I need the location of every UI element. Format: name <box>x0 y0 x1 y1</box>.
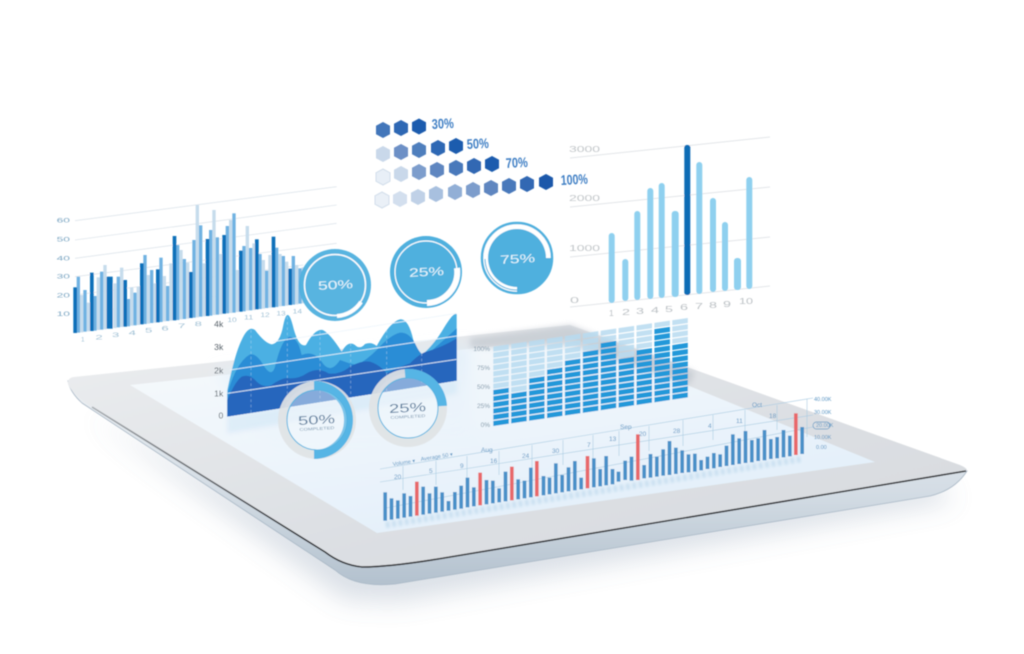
x axis labels: 2 <box>622 307 630 317</box>
bars <box>609 162 752 303</box>
area chart <box>214 313 457 433</box>
dark bars <box>73 235 292 333</box>
y axis labels <box>214 319 224 420</box>
donut label: 25% <box>389 400 426 416</box>
x axis labels: 8 <box>195 321 203 328</box>
ring gauge: 25% <box>390 236 462 308</box>
row: 100% <box>375 171 589 208</box>
column cells <box>493 318 688 426</box>
y axis labels: 0 <box>219 410 224 420</box>
x axis labels: 1 <box>609 308 614 318</box>
date and control labels: Average 50 ▾ <box>420 452 453 463</box>
date and control labels: Oct <box>752 402 762 409</box>
tablet side edge <box>68 381 967 585</box>
x axis labels: 9 <box>723 299 731 309</box>
date and control labels: Volume ▾ <box>392 458 416 468</box>
rounded bar chart: right <box>569 137 770 318</box>
chart grid lines <box>75 187 337 314</box>
x axis labels: 4 <box>651 305 659 315</box>
bars: September and October section <box>617 413 804 482</box>
date and control labels <box>392 402 777 481</box>
donut track <box>282 386 352 454</box>
red volume bars <box>415 456 589 516</box>
hexagon progress rows <box>375 115 589 208</box>
back corner shading <box>470 325 695 385</box>
full scene <box>57 115 967 602</box>
x axis labels: 10 <box>739 296 753 306</box>
medium bars <box>77 213 302 333</box>
tablet black seam line <box>92 407 966 567</box>
date and control labels: Aug <box>481 447 493 454</box>
y axis labels: 3000 <box>569 144 600 154</box>
area series: light <box>227 314 457 417</box>
date and control labels: 13 <box>609 436 617 443</box>
x axis labels: 5 <box>665 304 673 314</box>
area grid lines <box>227 313 457 393</box>
row: 100%: 100% <box>560 171 589 188</box>
y axis labels <box>569 144 600 305</box>
x axis labels: 8 <box>709 300 717 310</box>
date and control labels: 11 <box>736 418 743 425</box>
red volume bars <box>636 413 798 480</box>
y axis labels: 0% <box>481 422 490 429</box>
date and control labels: 9 <box>460 463 464 470</box>
tablet top face <box>68 325 967 567</box>
y axis labels: 75% <box>477 365 490 372</box>
right axis labels: 30.00K <box>814 410 832 416</box>
y axis labels <box>57 218 71 318</box>
date and control labels: 20 <box>639 431 647 438</box>
bar reflections <box>386 459 802 525</box>
volume chart <box>380 397 834 525</box>
y axis labels: 25% <box>477 403 490 410</box>
right axis labels: 20.00K <box>816 423 834 429</box>
x axis labels: 6 <box>680 302 688 312</box>
x axis labels: 6 <box>161 326 170 333</box>
date and control labels: 7 <box>587 442 591 449</box>
area series: medium <box>227 328 457 417</box>
grid lines <box>570 137 770 307</box>
highlighted bar <box>684 145 690 295</box>
x axis labels: 3 <box>112 332 120 339</box>
donut caption: COMPLETED <box>390 413 426 420</box>
right axis labels <box>814 397 834 451</box>
x axis labels: 7 <box>695 301 703 311</box>
volume grid <box>380 398 813 508</box>
date and control labels: 18 <box>769 413 777 420</box>
gauge label: 25% <box>409 264 445 280</box>
blue volume bars <box>383 456 614 521</box>
right axis labels: 40.00K <box>814 397 832 403</box>
row: 70% <box>376 154 529 185</box>
donut progress arc <box>314 386 348 454</box>
x axis labels: 12 <box>260 312 270 319</box>
tablet screen <box>130 338 875 533</box>
donut label: 50% <box>298 412 335 428</box>
y axis labels: 100% <box>473 346 490 353</box>
x axis labels: 3 <box>636 306 644 316</box>
date and control labels: 16 <box>490 458 498 465</box>
blue volume bars <box>617 427 804 482</box>
pale bars <box>80 205 305 332</box>
ring gauge: 75% <box>482 223 552 293</box>
y axis labels: 1000 <box>569 243 600 253</box>
ring gauge: 50% <box>299 249 371 321</box>
row: 30% <box>376 115 455 138</box>
donut progress arc <box>405 373 442 406</box>
x axis labels: 11 <box>244 314 254 321</box>
y axis labels: 1k <box>214 389 224 399</box>
highlighted axis value pill <box>813 422 830 429</box>
stacked block chart <box>473 318 688 429</box>
x axis labels <box>609 296 753 318</box>
holographic glow <box>215 345 560 470</box>
date and control labels: 4 <box>708 423 712 430</box>
x axis labels: 4 <box>129 330 137 337</box>
right axis labels: 10.00K <box>814 435 832 441</box>
y axis labels <box>473 346 490 429</box>
y axis labels: 0 <box>570 295 580 305</box>
x axis labels <box>81 308 303 343</box>
date and control labels: 24 <box>522 453 530 460</box>
x axis labels: 14 <box>293 308 303 315</box>
row: 50% <box>376 135 490 162</box>
y axis labels: 3k <box>214 342 224 352</box>
gauge label: 50% <box>318 277 354 293</box>
donut gauge: 50% completed <box>282 386 352 454</box>
y axis labels: 4k <box>214 319 224 329</box>
date and control labels: 5 <box>429 468 433 475</box>
x axis labels: 13 <box>276 310 286 317</box>
y axis labels: 10 <box>57 311 71 318</box>
y axis labels: 50 <box>57 236 71 243</box>
right axis labels: 0.00 <box>816 445 827 451</box>
x axis labels: 10 <box>227 317 237 324</box>
row: 50%: 50% <box>466 135 490 152</box>
bars: August section <box>383 456 614 521</box>
y axis labels: 30 <box>57 274 71 281</box>
date and control labels: 30 <box>552 448 560 455</box>
area reflection <box>227 381 457 433</box>
block columns <box>493 318 688 426</box>
donut caption: COMPLETED <box>299 425 335 432</box>
x axis labels: 1 <box>81 336 85 343</box>
x axis labels: 5 <box>145 328 153 335</box>
row: 70%: 70% <box>505 154 529 171</box>
donut track <box>374 374 442 442</box>
y axis labels: 2k <box>214 365 224 375</box>
grouped bar chart: left <box>57 187 337 343</box>
date and control labels: 28 <box>673 428 681 435</box>
gauge label: 75% <box>500 251 536 267</box>
dashed verticals <box>251 317 422 413</box>
donut gauge: 25% completed <box>374 373 442 442</box>
tablet drop shadow <box>90 415 955 602</box>
x axis labels: 2 <box>95 334 104 341</box>
area series: dark <box>227 338 457 417</box>
date and control labels: 20 <box>394 474 402 481</box>
row: 30%: 30% <box>431 115 455 132</box>
y axis labels: 40 <box>57 255 71 262</box>
y axis labels: 2000 <box>569 193 600 203</box>
date and control labels: Sep <box>620 424 632 431</box>
tablet <box>68 325 967 602</box>
y axis labels: 60 <box>57 218 71 225</box>
y axis labels: 50% <box>477 384 490 391</box>
y axis labels: 20 <box>57 293 71 300</box>
x axis labels: 7 <box>178 323 186 330</box>
